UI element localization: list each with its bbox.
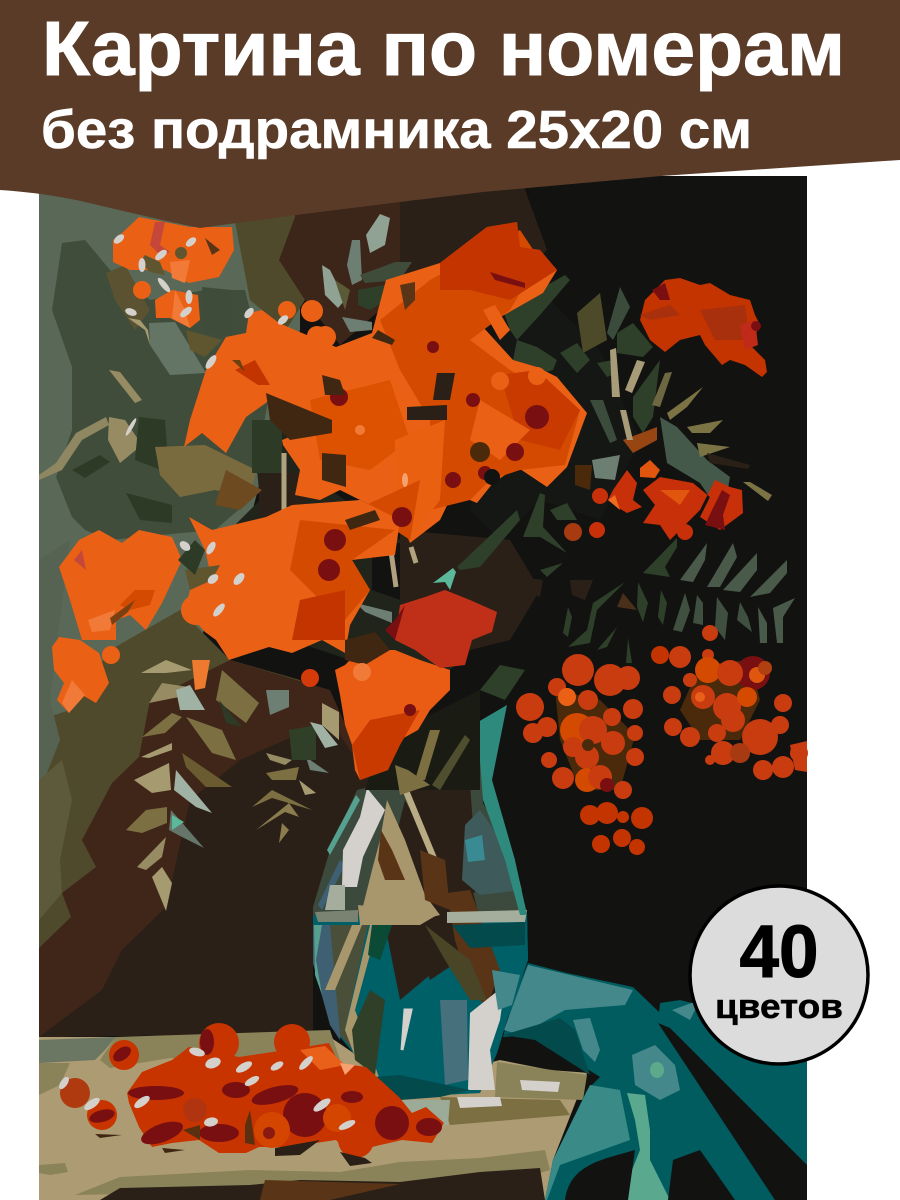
foliage: tan stems bbox=[284, 453, 416, 587]
foliage: centre leaves below the main mass bbox=[356, 493, 593, 700]
berry mass: large central bbox=[184, 222, 587, 543]
berry cluster: top left bbox=[113, 217, 234, 328]
fallen berries on the table bbox=[57, 1023, 444, 1166]
berry cluster: right middle bbox=[564, 460, 743, 541]
badge number: 40 bbox=[740, 910, 818, 993]
fern leaves: lower left bbox=[126, 660, 339, 911]
badge: 40 colours bbox=[690, 886, 868, 1064]
teal cloth bbox=[503, 963, 807, 1200]
painting: rowan berries in a glass vase bbox=[39, 176, 808, 1200]
berry cluster: lower centre bbox=[301, 590, 497, 780]
stems above the vase bbox=[365, 690, 480, 795]
highlights on the berries bbox=[57, 1046, 357, 1132]
berry cluster: far right bbox=[651, 625, 808, 780]
glass vase bbox=[313, 705, 528, 1108]
berry cluster: lower right bbox=[516, 654, 653, 855]
foliage: upper left tan and olive leaves bbox=[39, 265, 306, 523]
fern leaves: right bbox=[563, 538, 795, 663]
title: Картина по номерам bbox=[42, 6, 845, 92]
table bbox=[39, 1030, 590, 1200]
painting background: wall tones bbox=[39, 176, 640, 1037]
foliage: top sage leaves bbox=[322, 214, 412, 332]
painted highlights on the upper berries bbox=[112, 232, 408, 618]
berry cluster: centre left bbox=[178, 500, 412, 690]
berry cluster: top right bbox=[640, 278, 767, 377]
header banner bbox=[0, 0, 900, 228]
foliage: upper right leaves bbox=[503, 275, 772, 517]
subtitle: без подрамника 25х20 см bbox=[41, 100, 752, 160]
berry cluster: left bbox=[52, 530, 182, 713]
badge label: цветов bbox=[715, 988, 843, 1026]
